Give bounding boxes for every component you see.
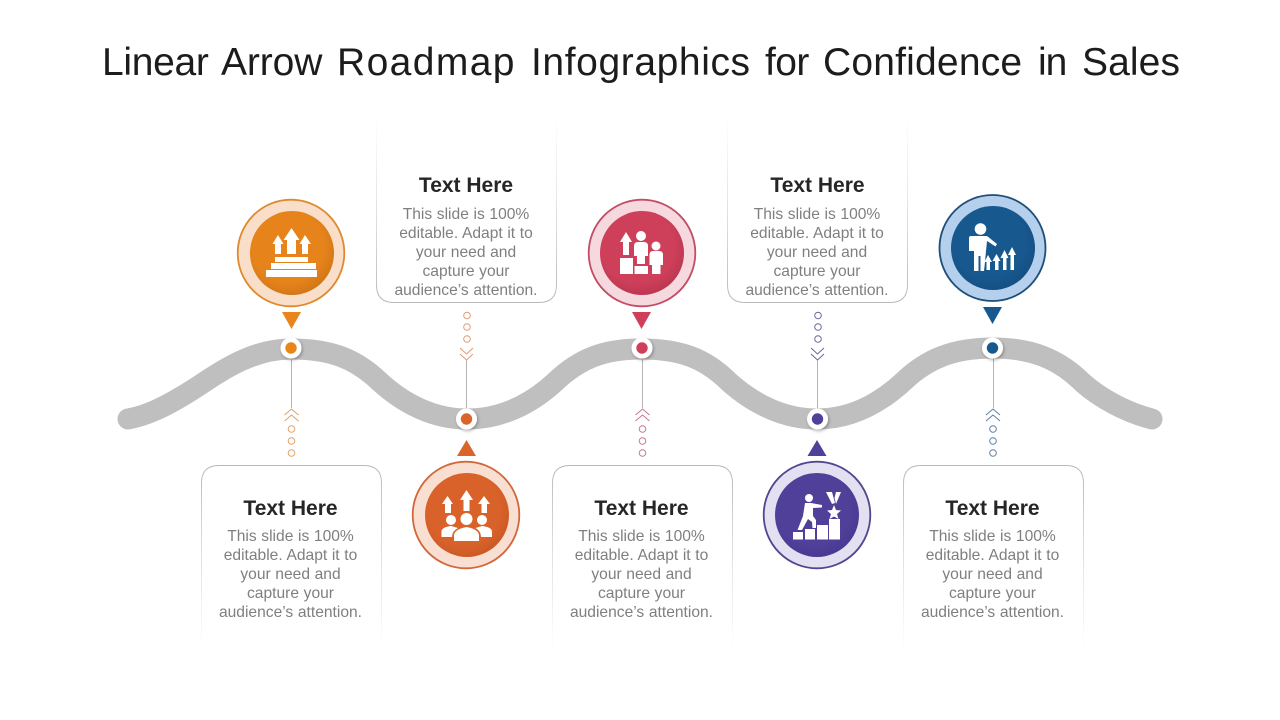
pointer 2 [457,440,476,456]
title: Infographics [531,41,762,84]
title: Sales [1082,41,1180,84]
body text 4: capture your [774,263,860,280]
heading 1: Text Here [243,497,338,520]
body text 3: editable. Adapt it to [575,547,709,564]
body text 1: audience’s attention. [219,604,362,621]
heading 5: Text Here [945,497,1040,520]
body text 3: audience’s attention. [570,604,713,621]
pointer 4 [808,440,826,456]
step 2: dark orange [413,312,519,568]
panel: text card 2 [376,118,556,302]
body text 2: your need and [416,244,516,261]
node 4 [807,408,828,430]
title: for [765,41,819,84]
body text 5: your need and [942,566,1043,583]
badge 3 [589,200,695,306]
body text 1: This slide is 100% [227,528,354,545]
title: Confidence [823,41,1033,84]
body text 5: capture your [949,585,1036,602]
heading 2: Text Here [419,174,513,197]
step 5: blue [940,195,1046,456]
title: Arrow [221,41,333,84]
title: Roadmap [337,41,528,84]
node 5 [982,338,1003,358]
step 3: red [589,200,695,456]
badge 2 [413,462,519,568]
winding road [128,348,1152,419]
icon: team with arrows [442,490,492,541]
body text 1: your need and [240,566,341,583]
connector 3 [636,358,650,456]
heading 4: Text Here [770,174,865,197]
body text 5: editable. Adapt it to [926,547,1060,564]
body text 4: your need and [767,244,867,261]
node 3 [632,338,652,358]
icon: people on blocks [620,231,663,274]
node 1 [280,338,302,358]
body text 2: This slide is 100% [403,206,529,223]
pointer 1 [282,312,301,329]
body text 4: editable. Adapt it to [750,225,884,242]
badge 5 [940,195,1046,301]
title: in [1038,41,1076,84]
connector 1 [284,358,298,456]
body text 5: This slide is 100% [929,528,1056,545]
pointer 5 [983,307,1002,324]
icon: climbing steps to medal [793,492,841,540]
icon: person with rising arrows [969,223,1016,271]
body text 2: audience’s attention. [394,282,538,299]
body text 3: your need and [591,566,692,583]
title: Linear [102,41,219,84]
connector 4 [811,312,824,410]
panel: text card 3 [552,466,732,650]
body text 2: editable. Adapt it to [399,225,533,242]
connector 5 [986,358,1000,456]
step 1: orange [238,200,344,456]
icon: arrows over podium [266,228,317,277]
body text 1: capture your [247,585,334,602]
body text 4: This slide is 100% [754,206,880,223]
body text 2: capture your [423,263,509,280]
badge 1 [238,200,344,306]
body text 5: audience’s attention. [921,604,1064,621]
step 4: purple [764,312,870,568]
panel: text card 5 [904,466,1084,650]
body text 3: capture your [598,585,685,602]
panel: text card 4 [728,118,908,302]
node 2 [456,408,477,430]
badge 4 [764,462,870,568]
pointer 3 [632,312,651,329]
body text 3: This slide is 100% [578,528,705,545]
heading 3: Text Here [594,497,689,520]
body text 1: editable. Adapt it to [224,547,358,564]
connector 2 [460,312,473,410]
panel: text card 1 [202,466,382,650]
body text 4: audience’s attention. [745,282,889,299]
